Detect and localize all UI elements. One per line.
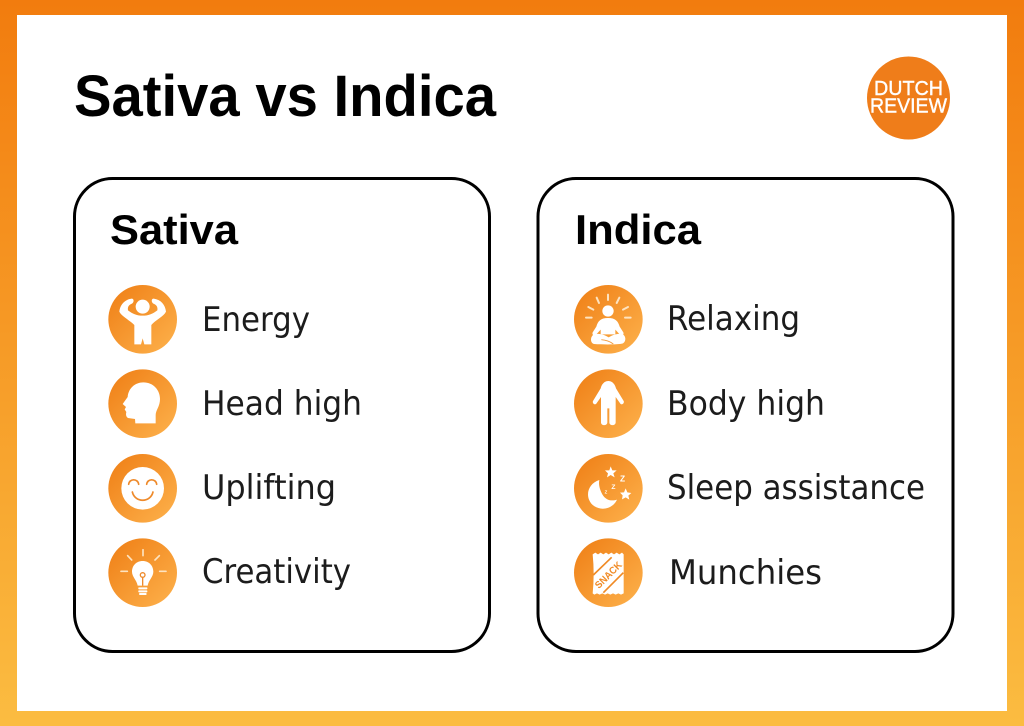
panel: sativa (74, 178, 490, 652)
icon: moon and stars: Z (605, 489, 608, 494)
icon: moon and stars: Z (620, 474, 625, 484)
label: head high: Head high (202, 384, 362, 424)
label: creativity: Creativity (202, 552, 351, 592)
label: relaxing: Relaxing (667, 299, 800, 339)
label: body high: Body high (667, 384, 825, 424)
label: munchies: Munchies (669, 553, 822, 593)
icon: smiling face (108, 454, 177, 523)
panel: indica (538, 178, 953, 652)
icon: moon and stars (574, 454, 643, 523)
icon: moon and stars: Z (611, 484, 615, 491)
label: uplifting: Uplifting (202, 468, 336, 508)
icon: snack bag (574, 538, 643, 607)
icon: light bulb (108, 538, 177, 607)
panel outline: indica (538, 178, 953, 652)
logo: Dutch Review: REVIEW (870, 96, 947, 118)
label: energy: Energy (202, 300, 310, 340)
icon: standing body (574, 369, 643, 438)
icon: meditating figure (574, 285, 643, 354)
title: Sativa vs Indica (74, 64, 497, 129)
panel outline: sativa (74, 178, 490, 652)
label: sleep assistance: Sleep assistance (667, 468, 925, 508)
logo: Dutch Review (867, 56, 950, 140)
icon: head (108, 369, 177, 438)
heading: sativa: Sativa (110, 206, 239, 253)
logo: Dutch Review: DUTCH (874, 78, 943, 100)
heading: indica: Indica (575, 206, 702, 253)
icon: snack bag: SNACK (593, 559, 625, 591)
icon: flexing body (108, 285, 177, 354)
